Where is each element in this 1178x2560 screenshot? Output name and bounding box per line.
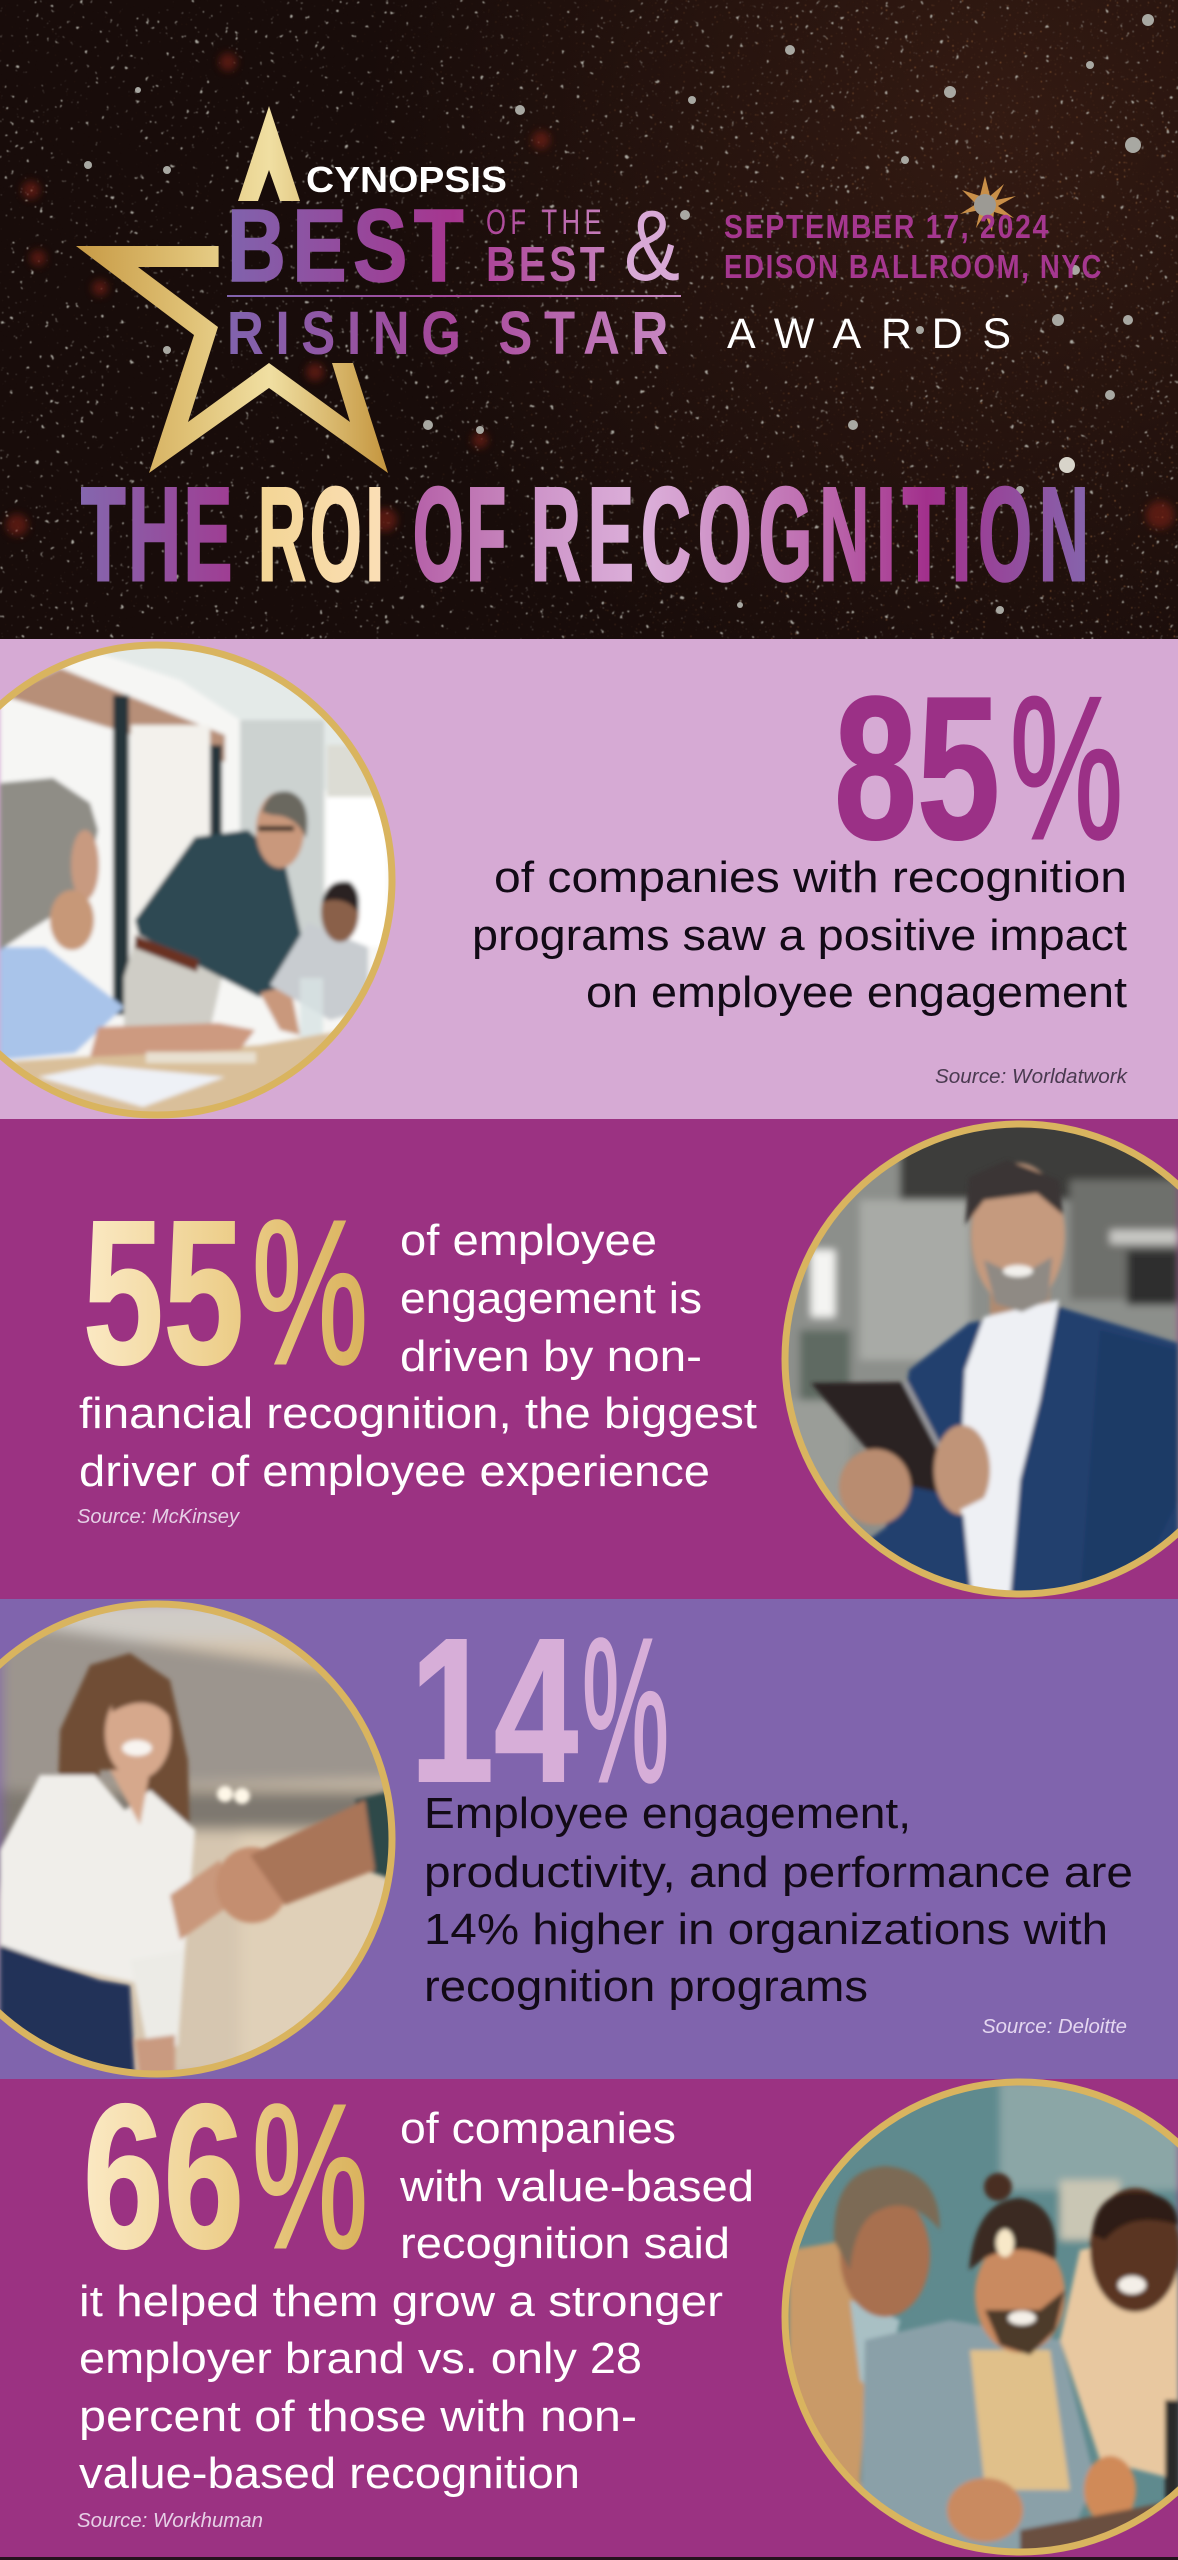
photo: laughing colleagues (780, 2080, 1178, 2560)
stat: 66%: 66 (83, 2062, 244, 2291)
photo ring (0, 1604, 392, 2074)
event date and venue: SEPTEMBER 17, 2024 (724, 208, 1050, 245)
stat: 55%: 55 (83, 1178, 244, 1407)
title: ROI (258, 461, 388, 609)
stat description: of companies with recognition (494, 853, 1127, 902)
awards label: AWARDS (727, 310, 1011, 358)
header panel (0, 0, 1178, 640)
starfield background (0, 0, 1178, 640)
stat description: Employee engagement, (424, 1789, 911, 1838)
title (81, 461, 1096, 609)
stat description: it helped them grow a stronger (79, 2277, 723, 2326)
stat description: recognition said (400, 2219, 730, 2268)
logo wordmark: Best of the Best: OF THE (486, 203, 606, 242)
stat: 85%: 85 (834, 655, 1000, 882)
logo wordmark: Best of the Best (227, 188, 681, 303)
stat description (424, 1789, 1133, 2011)
source: Source: Worldatwork (935, 1066, 1128, 1088)
title: OF (413, 461, 509, 609)
gold star logo (76, 106, 388, 473)
stat description: with value-based (399, 2162, 754, 2211)
stat description: of employee (400, 1216, 657, 1265)
panel: 14% stat (0, 1596, 1178, 2080)
stat description: of companies (400, 2104, 676, 2153)
photo ring (785, 2082, 1178, 2552)
panel: 66% stat (0, 2062, 1178, 2560)
event date and venue (724, 208, 1103, 285)
photo ring (0, 645, 392, 1115)
stat: 14%: 14 (410, 1596, 578, 1825)
stat description: productivity, and performance are (424, 1848, 1133, 1897)
photo ring (785, 1124, 1178, 1594)
logo wordmark: Best of the Best: BEST (486, 238, 608, 292)
logo wordmark: Best of the Best: & (624, 190, 680, 302)
logo wordmark: Best of the Best: BEST (227, 188, 470, 303)
stat description: driver of employee experience (79, 1447, 710, 1496)
bright star (960, 176, 1016, 232)
source: Source: McKinsey (77, 1506, 240, 1528)
source: Source: Workhuman (77, 2510, 263, 2532)
panel: 55% stat (0, 1119, 1178, 1600)
photo: businessman with tablet (780, 1120, 1178, 1600)
logo wordmark: Rising Star: RISING STAR (227, 299, 680, 367)
title: THE (81, 461, 235, 609)
stat description: on employee engagement (586, 968, 1127, 1017)
stat: 55%: % (252, 1178, 368, 1407)
panel: 14% stat: % (582, 1596, 669, 1825)
source: Source: Deloitte (982, 2016, 1127, 2038)
stat description: 14% higher in organizations with (424, 1905, 1108, 1954)
Cynopsis wordmark: CYNOPSIS (306, 159, 507, 200)
stat description: percent of those with non- (79, 2392, 637, 2441)
panel: 85% stat (0, 639, 1178, 1125)
stat description: recognition programs (424, 1962, 868, 2011)
event date and venue: EDISON BALLROOM, NYC (724, 248, 1103, 285)
stat description (79, 2104, 754, 2498)
stat description (472, 853, 1127, 1017)
stat description: employer brand vs. only 28 (79, 2334, 642, 2383)
stat description: programs saw a positive impact (472, 911, 1127, 960)
stat: 66%: % (252, 2062, 368, 2291)
photo: team meeting (0, 640, 400, 1125)
stat description: engagement is (400, 1274, 702, 1323)
stat description: value-based recognition (79, 2449, 580, 2498)
stat description: driven by non- (400, 1332, 702, 1381)
photo: smiling woman handshake (0, 1600, 400, 2080)
stat description: financial recognition, the biggest (79, 1389, 757, 1438)
stat description (79, 1216, 757, 1496)
